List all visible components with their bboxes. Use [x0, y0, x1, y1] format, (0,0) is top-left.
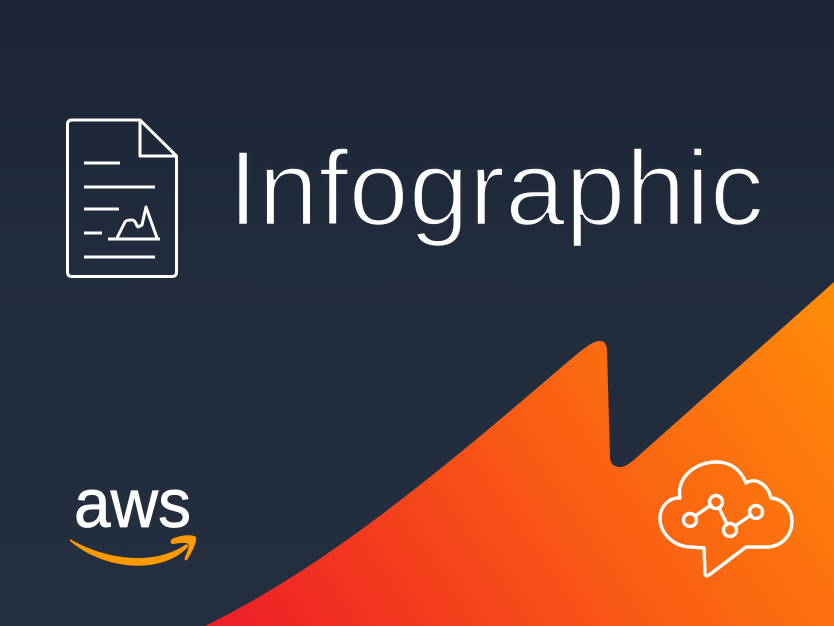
logo: aws — [70, 465, 196, 566]
icon: document with chart — [68, 120, 176, 276]
logo smile arrow — [70, 535, 196, 566]
title: Infographic — [228, 128, 764, 248]
logo wordmark: aws — [74, 465, 191, 542]
orange wave shape — [205, 282, 834, 626]
icon: cloud speech bubble with line chart — [660, 462, 792, 576]
